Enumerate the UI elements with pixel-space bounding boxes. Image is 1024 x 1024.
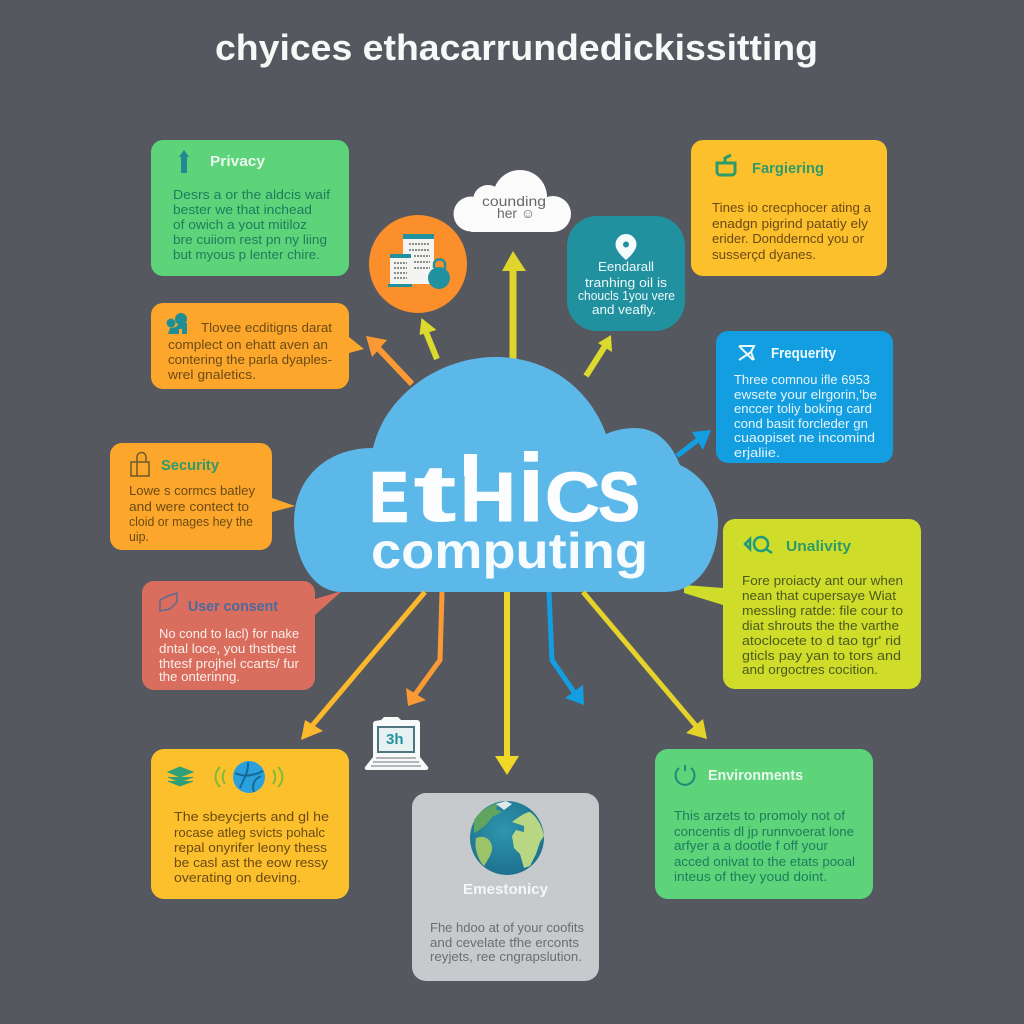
heading: ethics: i bbox=[518, 435, 544, 542]
heading: ethics: t bbox=[414, 449, 456, 538]
heading: unalivity: Unalivity bbox=[786, 538, 852, 555]
heading: security: Security bbox=[161, 457, 220, 474]
text: networks body bbox=[174, 809, 329, 885]
text: user consent body bbox=[159, 626, 300, 684]
text: orange note body: contering the parla dyaples- bbox=[168, 352, 332, 367]
text: fargiering body: Tines io crecphocer ating a bbox=[712, 200, 872, 215]
text: teal card body: Eendarall bbox=[598, 259, 654, 274]
arrow: yellow down centre bbox=[495, 592, 519, 775]
panel: networks bbox=[151, 749, 349, 899]
text: emestonicy body: Fhe hdoo at of your coofits bbox=[430, 920, 584, 935]
icon: timer bbox=[676, 765, 694, 785]
text: frequerity body: erjaliie. bbox=[734, 445, 780, 460]
heading: computing: computing bbox=[371, 523, 648, 579]
text: environments body: concentis dl jp runnvoerat lone bbox=[674, 824, 854, 839]
text: environments body: arfyer a a dootle f off your bbox=[674, 838, 829, 853]
arrow: small yellow up-left bbox=[420, 318, 437, 359]
text: environments body: This arzets to promoly not of bbox=[674, 808, 845, 823]
text: emestonicy body bbox=[430, 920, 584, 964]
text: cloud label: her ☺ bbox=[497, 205, 535, 221]
panel: frequerity bbox=[716, 331, 893, 463]
arrow: yellow down-right bbox=[583, 592, 707, 739]
text: unalivity body bbox=[742, 573, 903, 677]
heading: emestonicy: Emestonicy bbox=[463, 881, 549, 898]
text: cloud label: counding bbox=[482, 193, 546, 209]
icon: people bbox=[166, 313, 187, 334]
text: fargiering body: susserçd dyanes. bbox=[712, 247, 816, 262]
text: privacy body: Desrs a or the aldcis waif bbox=[173, 187, 330, 202]
text: orange note body: complect on ehatt aven an bbox=[168, 337, 328, 352]
icon: layers bbox=[168, 767, 193, 786]
text: laptop screen: 3h bbox=[386, 731, 404, 748]
icon: location pin bbox=[616, 234, 636, 260]
heading: ethics: C bbox=[545, 458, 600, 536]
text: orange note body: wrel gnaletics. bbox=[167, 367, 256, 382]
text: privacy body: bre cuiiom rest pn ny liing bbox=[173, 232, 327, 247]
icon: globe with waves bbox=[216, 761, 282, 793]
text: networks body: be casl ast the eow ressy bbox=[174, 855, 329, 870]
text: unalivity body: messling ratde: file cour to bbox=[742, 603, 903, 618]
heading: environments: Environments bbox=[708, 767, 803, 784]
text: teal card body: choucls 1you vere bbox=[578, 288, 675, 303]
text: orange note body: Tlovee ecditigns darat bbox=[201, 320, 332, 335]
arrow: up centre bbox=[502, 251, 526, 360]
text: unalivity body: and orgoctres cocition. bbox=[742, 662, 878, 677]
text: frequerity body: Three comnou ifle 6953 bbox=[734, 372, 870, 387]
text: networks body: The sbeycjerts and gl he bbox=[174, 809, 329, 824]
text: frequerity body: enccer toliy boking card bbox=[734, 401, 872, 416]
text: unalivity body: gticls pay yan to tors and bbox=[742, 648, 901, 663]
text: emestonicy body: reyjets, ree cngrapslution. bbox=[430, 949, 582, 964]
text: teal card body: and veafly. bbox=[592, 302, 656, 317]
heading: frequerity: Frequerity bbox=[771, 345, 837, 362]
text: unalivity body: diat shrouts the the varthe bbox=[742, 618, 899, 633]
text: fargiering body: enadgn pigrind patatiy ely bbox=[712, 216, 869, 231]
text: environments body: inteus of they youd doint. bbox=[674, 869, 827, 884]
heading: ethics bbox=[370, 435, 640, 542]
heading: ethics: E bbox=[370, 458, 408, 536]
arrow: yellow up-right bbox=[586, 335, 612, 376]
title: chyices ethacarrundedickissitting bbox=[215, 27, 818, 68]
panel: fargiering bbox=[691, 140, 887, 276]
icon: building and lock in orange circle bbox=[369, 215, 467, 313]
text: emestonicy body: and cevelate tfhe erconts bbox=[430, 935, 580, 950]
text: user consent body: No cond to lacl) for nake bbox=[159, 626, 299, 641]
heading: ethics: S bbox=[598, 458, 640, 536]
text: teal card body: tranhing oil is bbox=[585, 275, 668, 290]
text: unalivity body: Fore proiacty ant our when bbox=[742, 573, 903, 588]
icon: earth globe bbox=[470, 801, 544, 875]
panel: user consent bbox=[142, 581, 342, 690]
text: orange note body bbox=[167, 320, 332, 382]
text: unalivity body: nean that cupersaye Wiat bbox=[742, 588, 896, 603]
text: security body: uip. bbox=[129, 529, 149, 544]
text: privacy body: of owich a yout mitiloz bbox=[173, 217, 307, 232]
heading: privacy: Privacy bbox=[210, 153, 266, 170]
icon: consent bbox=[160, 593, 177, 611]
panel: unalivity bbox=[684, 519, 921, 689]
arrow: yellow down-left bbox=[301, 592, 425, 740]
central cloud bbox=[294, 357, 718, 592]
panel: environments bbox=[655, 749, 873, 899]
text: cloud label bbox=[482, 193, 546, 221]
icon: magnifier bbox=[745, 537, 772, 553]
icon: small white cloud bbox=[454, 170, 571, 232]
arrow: orange elbow down bbox=[406, 592, 442, 706]
icon: privacy bbox=[179, 150, 189, 173]
text: user consent body: thtesf projhel ccarts/ fur bbox=[159, 656, 300, 671]
text: frequerity body: cond basit forcleder gn bbox=[734, 416, 868, 431]
arrow: blue right bbox=[677, 430, 711, 456]
panel: privacy bbox=[151, 140, 349, 276]
text: fargiering body bbox=[712, 200, 872, 262]
icon: pot bbox=[717, 155, 735, 175]
heading: fargiering: Fargiering bbox=[752, 160, 824, 177]
heading: user consent: User consent bbox=[188, 598, 278, 615]
icon: laptop bbox=[365, 717, 428, 770]
text: fargiering body: erider. Dondderncd you or bbox=[712, 231, 865, 246]
text: environments body: acced onivat to the etats pooal bbox=[674, 854, 855, 869]
text: teal card body bbox=[578, 259, 675, 317]
text: security body: Lowe s cormcs batley bbox=[129, 483, 255, 498]
text: networks body: overating on deving. bbox=[174, 870, 301, 885]
text: privacy body: bester we that inchead bbox=[173, 202, 312, 217]
heading: ethics: H bbox=[460, 458, 516, 536]
arrow: orange up-left bbox=[366, 336, 412, 384]
text: privacy body bbox=[173, 187, 330, 262]
text: frequerity body: ewsete your elrgorin,'be bbox=[734, 387, 877, 402]
panel: teal location card bbox=[567, 216, 685, 331]
text: privacy body: but myous p lenter chire. bbox=[173, 247, 320, 262]
panel: orange note bbox=[151, 303, 364, 389]
text: security body bbox=[129, 483, 255, 544]
text: frequerity body: cuaopiset ne incomind bbox=[734, 430, 875, 445]
text: environments body bbox=[674, 808, 855, 884]
text: unalivity body: atoclocete to d tao tgr' rid bbox=[742, 633, 901, 648]
panel: emestonicy bbox=[412, 793, 599, 981]
text: networks body: rocase atleg svicts pohalc bbox=[174, 825, 326, 840]
text: networks body: repal onyrifer leony thess bbox=[174, 840, 328, 855]
icon: crossed box bbox=[739, 346, 754, 360]
icon: padlock bbox=[131, 452, 149, 476]
text: user consent body: the onterinng. bbox=[159, 669, 240, 684]
panel: security bbox=[110, 443, 295, 550]
text: security body: cloid or mages hey the bbox=[129, 514, 253, 529]
arrow: blue elbow down bbox=[549, 592, 584, 705]
text: user consent body: dntal loce, you thstbest bbox=[159, 641, 296, 656]
text: security body: and were contect to bbox=[129, 499, 249, 514]
text: frequerity body bbox=[734, 372, 877, 460]
